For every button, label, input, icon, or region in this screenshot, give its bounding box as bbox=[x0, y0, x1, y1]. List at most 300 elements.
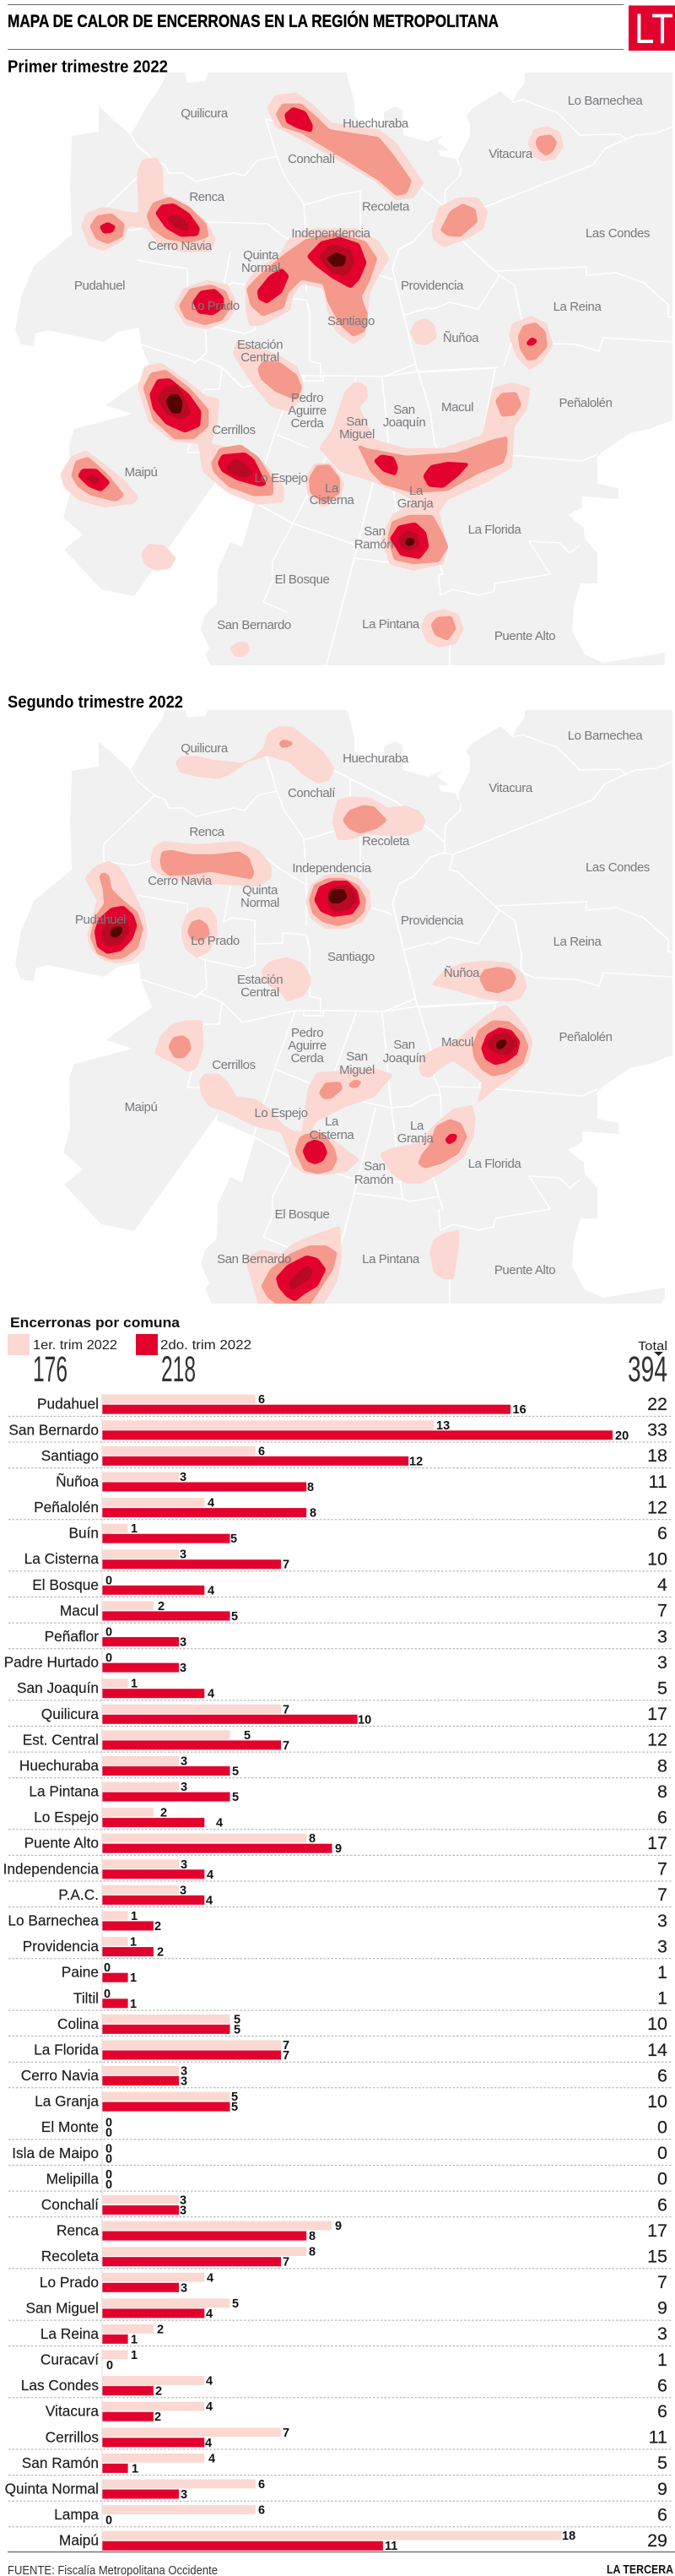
row: Cerro Navia: 6 bbox=[657, 2065, 667, 2085]
row: San Ramón: 5 bbox=[657, 2453, 667, 2473]
row: La Granja: 10 bbox=[647, 2091, 667, 2112]
legend: second quarter bbox=[136, 1334, 251, 1390]
row: El Monte: 0 bbox=[657, 2117, 667, 2137]
row: Peñaflor: 0 bbox=[105, 1626, 112, 1640]
row: Cerrillos: Cerrillos bbox=[46, 2428, 99, 2445]
row: Lampa: 0 bbox=[105, 2514, 112, 2528]
row: Las Condes: 4 bbox=[206, 2375, 213, 2389]
commune labels: second quarter: Pedro bbox=[291, 1026, 323, 1040]
commune labels: first quarter: Lo Barnechea bbox=[568, 94, 643, 108]
row: Cerro Navia bbox=[8, 2065, 672, 2089]
row: Maipú: 29 bbox=[647, 2530, 667, 2551]
row: Tiltil bbox=[8, 1988, 672, 2011]
row: El Bosque: 4 bbox=[208, 1584, 214, 1597]
row: Huechuraba: 5 bbox=[232, 1765, 239, 1778]
row: La Florida: 7 bbox=[283, 2049, 289, 2063]
commune labels: first quarter: Pudahuel bbox=[74, 279, 125, 293]
row: San Joaquín: 4 bbox=[208, 1688, 214, 1701]
row: San Joaquín bbox=[8, 1678, 672, 1701]
commune labels: second quarter: Vitacura bbox=[489, 781, 533, 795]
commune labels: first quarter: Recoleta bbox=[362, 199, 410, 214]
row: La Pintana: 5 bbox=[232, 1791, 239, 1804]
row: Lo Prado: 7 bbox=[657, 2272, 667, 2292]
row: Las Condes bbox=[8, 2375, 672, 2399]
commune labels: second quarter: Independencia bbox=[292, 861, 372, 876]
row: Huechuraba: 8 bbox=[657, 1755, 667, 1776]
commune labels: second quarter: Ñuñoa bbox=[444, 966, 480, 980]
commune labels: second quarter: Macul bbox=[441, 1035, 473, 1049]
legend: second quarter: 2do. trim 2022 bbox=[160, 1338, 251, 1353]
commune labels: second quarter: Joaquín bbox=[383, 1051, 425, 1066]
commune labels: first quarter: Quilicura bbox=[181, 106, 229, 121]
row: San Ramón bbox=[8, 2452, 672, 2476]
heat zones: first quarter bbox=[60, 93, 564, 657]
commune labels: second quarter: Cerro Navia bbox=[148, 874, 213, 888]
row: Cerro Navia: Cerro Navia bbox=[21, 2067, 99, 2084]
row: Vitacura bbox=[46, 2400, 667, 2424]
commune labels: second quarter: San bbox=[393, 1038, 415, 1052]
commune labels: first quarter: Vitacura bbox=[489, 147, 533, 161]
commune labels: first quarter: Lo Espejo bbox=[254, 471, 308, 485]
row: Recoleta bbox=[8, 2246, 672, 2270]
row: Cerrillos: 11 bbox=[649, 2427, 667, 2448]
row: Ñuñoa: 11 bbox=[649, 1472, 667, 1492]
row: Peñalolén: 4 bbox=[208, 1497, 214, 1510]
row: Providencia: 1 bbox=[130, 1936, 137, 1950]
row: San Ramón: San Ramón bbox=[22, 2454, 99, 2471]
row: La Reina: 2 bbox=[157, 2323, 164, 2336]
row: Conchalí: 3 bbox=[180, 2194, 186, 2207]
row: San Miguel bbox=[8, 2297, 672, 2321]
row: P.A.C.: 4 bbox=[206, 1894, 213, 1907]
row: Est. Central: 7 bbox=[283, 1739, 289, 1753]
row: Santiago: 18 bbox=[647, 1445, 667, 1466]
row: La Cisterna: 7 bbox=[283, 1559, 289, 1572]
row: San Bernardo: 20 bbox=[615, 1429, 629, 1443]
row: Tiltil: 1 bbox=[657, 1988, 667, 2009]
row: Curacaví: 0 bbox=[106, 2359, 113, 2373]
commune labels: second quarter bbox=[75, 729, 650, 1277]
row: Tiltil: 0 bbox=[104, 1988, 111, 2001]
row: Padre Hurtado: Padre Hurtado bbox=[4, 1654, 99, 1671]
commune labels: first quarter: La Pintana bbox=[362, 617, 420, 632]
bar chart: encerronas por comuna bbox=[3, 1393, 672, 2553]
row: Las Condes: 2 bbox=[155, 2385, 162, 2399]
commune labels: second quarter: Santiago bbox=[327, 950, 375, 964]
row: Huechuraba: Huechuraba bbox=[19, 1757, 99, 1774]
row: Recoleta: 7 bbox=[283, 2256, 289, 2270]
commune labels: second quarter: Cerda bbox=[291, 1051, 324, 1066]
row: Macul: Macul bbox=[60, 1602, 99, 1619]
row: Pudahuel: 16 bbox=[513, 1403, 526, 1417]
row: Cerrillos: 4 bbox=[205, 2437, 212, 2450]
row: Pudahuel: 22 bbox=[647, 1394, 667, 1414]
commune labels: first quarter: Central bbox=[240, 350, 279, 365]
row: Huechuraba bbox=[8, 1754, 672, 1778]
commune labels: first quarter: Normal bbox=[241, 261, 280, 275]
row: El Bosque: 4 bbox=[657, 1575, 667, 1595]
row: Lo Barnechea: 2 bbox=[154, 1920, 161, 1933]
row: San Bernardo: 13 bbox=[436, 1419, 450, 1433]
row: Quinta Normal: 6 bbox=[258, 2478, 265, 2492]
row: Maipú: 18 bbox=[562, 2530, 575, 2543]
row: Huechuraba: 3 bbox=[181, 1754, 187, 1768]
row: San Joaquín: San Joaquín bbox=[17, 1679, 99, 1696]
commune labels: first quarter: Conchalí bbox=[288, 152, 336, 166]
commune labels: second quarter: San bbox=[364, 1159, 386, 1174]
row: Paine bbox=[62, 1961, 667, 1985]
commune labels: first quarter: Estación bbox=[237, 338, 283, 352]
row: Las Condes: 6 bbox=[657, 2375, 667, 2395]
row: Paine: 0 bbox=[104, 1961, 111, 1975]
row: Ñuñoa bbox=[56, 1471, 667, 1494]
commune labels: second quarter: Conchalí bbox=[288, 786, 336, 800]
commune labels: second quarter: Huechuraba bbox=[343, 751, 409, 766]
row: Peñaflor: 3 bbox=[657, 1626, 667, 1646]
row: Lo Barnechea: 1 bbox=[131, 1910, 138, 1923]
row: Curacaví bbox=[40, 2349, 667, 2373]
row: Padre Hurtado: 0 bbox=[105, 1651, 112, 1665]
row: Recoleta: 8 bbox=[309, 2246, 316, 2259]
row: El Monte: 0 bbox=[105, 2117, 112, 2130]
row: Maipú: Maipú bbox=[59, 2532, 99, 2549]
row: La Reina: 1 bbox=[131, 2333, 138, 2346]
legend: second quarter: 218 bbox=[161, 1349, 196, 1390]
row: Puente Alto: 9 bbox=[335, 1842, 342, 1856]
row: Santiago: 6 bbox=[258, 1445, 265, 1458]
row: El Monte bbox=[8, 2117, 672, 2140]
row: Isla de Maipo: 0 bbox=[105, 2142, 112, 2156]
row: Puente Alto bbox=[8, 1832, 672, 1856]
row: Pudahuel bbox=[8, 1393, 672, 1417]
commune labels: first quarter: Providencia bbox=[401, 279, 464, 293]
row: Las Condes: Las Condes bbox=[21, 2377, 99, 2394]
row: Santiago: Santiago bbox=[41, 1447, 99, 1464]
row: Lo Espejo: 2 bbox=[160, 1807, 167, 1820]
row: La Reina bbox=[8, 2323, 672, 2346]
commune labels: first quarter: La bbox=[409, 484, 424, 498]
row: El Monte: El Monte bbox=[41, 2118, 99, 2135]
panel: first quarter heat map bbox=[15, 71, 672, 670]
row: Peñalolén: Peñalolén bbox=[34, 1499, 99, 1516]
row: Cerro Navia: 3 bbox=[181, 2065, 187, 2079]
commune labels: first quarter: Miguel bbox=[339, 427, 375, 442]
row: Conchalí bbox=[8, 2194, 672, 2217]
row: Santiago: 12 bbox=[409, 1455, 423, 1468]
row: Macul bbox=[8, 1600, 672, 1624]
row: Cerrillos: 7 bbox=[283, 2427, 289, 2440]
row: Quilicura bbox=[8, 1703, 672, 1727]
row: Lo Espejo: 4 bbox=[216, 1817, 223, 1830]
commune labels: second quarter: Miguel bbox=[339, 1063, 375, 1077]
row: Maipú: 11 bbox=[385, 2540, 397, 2553]
row: Ñuñoa: 3 bbox=[180, 1471, 186, 1484]
commune labels: second quarter: Estación bbox=[237, 973, 283, 987]
commune labels: second quarter: Lo Espejo bbox=[254, 1106, 308, 1120]
row: Quilicura: Quilicura bbox=[41, 1706, 99, 1722]
row: Conchalí: 6 bbox=[657, 2194, 667, 2215]
row: Paine: 1 bbox=[657, 1962, 667, 1982]
heading: first quarter map: Primer trimestre 2022 bbox=[8, 57, 168, 76]
commune labels: first quarter: Joaquín bbox=[383, 415, 425, 430]
row: Peñaflor: 3 bbox=[180, 1636, 186, 1650]
row: Lo Espejo: Lo Espejo bbox=[34, 1809, 99, 1825]
commune labels: second quarter: La Florida bbox=[468, 1157, 521, 1171]
row: Melipilla: 0 bbox=[105, 2168, 112, 2182]
row: Independencia bbox=[3, 1858, 672, 1882]
commune labels: second quarter: La bbox=[410, 1119, 424, 1133]
row: La Pintana: 3 bbox=[181, 1781, 187, 1794]
commune labels: second quarter: Lo Prado bbox=[191, 934, 240, 948]
legend: first quarter bbox=[8, 1334, 117, 1390]
row: La Florida: 14 bbox=[647, 2040, 667, 2060]
row: Est. Central: Est. Central bbox=[23, 1731, 99, 1748]
row: La Granja: La Granja bbox=[35, 2093, 99, 2110]
row: Independencia: 4 bbox=[207, 1868, 213, 1882]
row: Curacaví: Curacaví bbox=[40, 2351, 99, 2367]
commune labels: first quarter: Aguirre bbox=[288, 404, 327, 418]
row: La Cisterna: 3 bbox=[180, 1548, 186, 1562]
legend: total bbox=[628, 1339, 667, 1390]
row: La Pintana: 8 bbox=[657, 1782, 667, 1802]
row: La Pintana: La Pintana bbox=[29, 1783, 99, 1800]
row: Lo Barnechea bbox=[8, 1910, 667, 1933]
row: San Miguel: 9 bbox=[657, 2298, 667, 2318]
commune labels: first quarter: San bbox=[346, 415, 368, 429]
commune labels: first quarter: Lo Prado bbox=[191, 299, 240, 313]
row: P.A.C. bbox=[8, 1884, 672, 1907]
commune labels: second quarter: Ramón bbox=[354, 1173, 393, 1187]
row: Padre Hurtado bbox=[4, 1651, 667, 1675]
commune labels: first quarter bbox=[74, 94, 650, 643]
commune labels: second quarter: El Bosque bbox=[275, 1207, 329, 1222]
commune labels: first quarter: Cerro Navia bbox=[148, 239, 213, 253]
row: Lo Prado bbox=[40, 2271, 667, 2295]
row: La Cisterna: La Cisterna bbox=[24, 1550, 99, 1567]
row: Peñalolén: 8 bbox=[310, 1507, 316, 1521]
row: Providencia: 3 bbox=[657, 1936, 667, 1956]
commune labels: second quarter: Lo Barnechea bbox=[568, 729, 643, 743]
commune labels: second quarter: Renca bbox=[189, 825, 225, 839]
row: Quilicura: 17 bbox=[647, 1704, 667, 1724]
row: Renca bbox=[57, 2220, 667, 2243]
commune labels: second quarter: Normal bbox=[240, 896, 279, 910]
row: Isla de Maipo: 0 bbox=[657, 2143, 667, 2163]
commune labels: first quarter: Peñalolén bbox=[559, 396, 613, 410]
row: Isla de Maipo: 0 bbox=[105, 2152, 112, 2166]
commune labels: first quarter: Renca bbox=[189, 190, 225, 204]
commune labels: second quarter: Cerrillos bbox=[212, 1058, 256, 1072]
row: La Florida bbox=[8, 2039, 672, 2063]
row: Macul: 2 bbox=[158, 1600, 165, 1613]
row: Lo Espejo: 6 bbox=[657, 1807, 667, 1827]
row: Vitacura: 6 bbox=[657, 2401, 667, 2421]
row: Lampa bbox=[8, 2504, 672, 2528]
row: Est. Central bbox=[8, 1729, 672, 1753]
row: Macul: 7 bbox=[657, 1601, 667, 1621]
commune labels: second quarter: La Reina bbox=[554, 935, 602, 949]
row: Renca: Renca bbox=[57, 2222, 99, 2239]
commune labels: second quarter: Pudahuel bbox=[75, 913, 126, 927]
base map: communes bbox=[15, 71, 672, 670]
commune labels: first quarter: Ramón bbox=[354, 537, 393, 552]
commune labels: second quarter: La Pintana bbox=[362, 1252, 420, 1266]
row: La Reina: La Reina bbox=[40, 2325, 99, 2342]
row: Independencia: Independencia bbox=[3, 1860, 99, 1877]
row: Lo Barnechea: Lo Barnechea bbox=[8, 1912, 99, 1928]
row: Melipilla: 0 bbox=[657, 2169, 667, 2189]
legend: first quarter: 176 bbox=[33, 1349, 68, 1390]
commune labels: second quarter: Cisterna bbox=[310, 1128, 354, 1142]
row: Conchalí: 3 bbox=[180, 2204, 186, 2217]
row: Quinta Normal: 9 bbox=[657, 2479, 667, 2499]
row: Melipilla: 0 bbox=[105, 2178, 112, 2192]
row: Pudahuel: 6 bbox=[258, 1393, 265, 1407]
commune labels: first quarter: La bbox=[325, 481, 339, 496]
row: Curacaví: 1 bbox=[657, 2350, 667, 2370]
row: Isla de Maipo bbox=[8, 2142, 672, 2166]
commune labels: first quarter: Cerrillos bbox=[212, 423, 256, 437]
row: Puente Alto: 17 bbox=[647, 1833, 667, 1853]
row: Vitacura: 4 bbox=[206, 2400, 213, 2414]
row: Maipú bbox=[59, 2530, 667, 2553]
row: Independencia: 3 bbox=[181, 1858, 187, 1872]
commune labels: first quarter: Puente Alto bbox=[494, 629, 555, 643]
row: Melipilla bbox=[8, 2168, 672, 2192]
row: Colina: Colina bbox=[57, 2015, 99, 2032]
commune labels: second quarter: Recoleta bbox=[362, 834, 410, 849]
row: Curacaví: 1 bbox=[131, 2349, 138, 2362]
heading: second quarter map: Segundo trimestre 2022 bbox=[8, 693, 183, 712]
commune labels: first quarter: El Bosque bbox=[275, 572, 329, 587]
commune labels: first quarter: Granja bbox=[397, 496, 434, 511]
row: Peñaflor: Peñaflor bbox=[45, 1628, 99, 1645]
commune labels: first quarter: Las Condes bbox=[586, 226, 650, 241]
row: Santiago bbox=[8, 1445, 672, 1468]
row: Lampa: 6 bbox=[258, 2504, 265, 2518]
commune labels: first quarter: Pedro bbox=[291, 391, 323, 405]
row: Recoleta: Recoleta bbox=[41, 2248, 99, 2264]
commune labels: first quarter: Maipú bbox=[125, 465, 157, 480]
commune labels: first quarter: Santiago bbox=[327, 314, 375, 328]
row: La Reina: 3 bbox=[657, 2324, 667, 2344]
commune labels: first quarter: Huechuraba bbox=[343, 117, 409, 131]
row: San Miguel: San Miguel bbox=[26, 2299, 99, 2316]
row: Melipilla: Melipilla bbox=[46, 2170, 99, 2187]
row: Colina: 5 bbox=[234, 2023, 240, 2036]
commune labels: second quarter: Maipú bbox=[125, 1100, 157, 1114]
row: Lampa: 6 bbox=[657, 2504, 667, 2524]
commune labels: first quarter: Cerda bbox=[291, 416, 324, 431]
row: Cerrillos bbox=[8, 2427, 672, 2450]
row: San Ramón: 4 bbox=[208, 2452, 215, 2465]
row: Puente Alto: Puente Alto bbox=[24, 1835, 99, 1852]
row: Ñuñoa: 8 bbox=[307, 1481, 314, 1494]
commune labels: second quarter: La bbox=[325, 1114, 339, 1129]
row: Lo Prado: Lo Prado bbox=[40, 2274, 99, 2291]
row: Cerro Navia: 3 bbox=[181, 2075, 187, 2089]
row: Recoleta: 15 bbox=[647, 2246, 667, 2266]
row: Quinta Normal bbox=[5, 2478, 672, 2502]
row: La Granja: 5 bbox=[231, 2091, 238, 2104]
row: Lampa: Lampa bbox=[54, 2506, 99, 2523]
row: San Bernardo: 33 bbox=[647, 1420, 667, 1440]
row: Buín: 1 bbox=[131, 1522, 138, 1536]
legend: total: Total bbox=[638, 1339, 667, 1353]
commune labels: second quarter: Aguirre bbox=[288, 1039, 327, 1053]
row: Vitacura: 2 bbox=[154, 2411, 161, 2424]
commune labels: first quarter: Independencia bbox=[291, 226, 371, 241]
row: La Granja bbox=[35, 2091, 667, 2114]
row: San Joaquín: 1 bbox=[131, 1678, 138, 1691]
row: Tiltil: Tiltil bbox=[73, 1989, 99, 2006]
row: Renca: 8 bbox=[309, 2230, 316, 2243]
heat zones: second quarter bbox=[84, 726, 533, 1306]
row: Conchalí: Conchalí bbox=[41, 2196, 99, 2213]
row: Buín: Buín bbox=[68, 1525, 99, 1542]
row: Colina: 5 bbox=[234, 2013, 240, 2026]
panel: second quarter heat map bbox=[15, 706, 672, 1306]
commune labels: first quarter: San bbox=[364, 524, 386, 539]
commune labels: first quarter: Quinta bbox=[243, 248, 279, 263]
row: Padre Hurtado: 3 bbox=[657, 1652, 667, 1673]
commune labels: second quarter: Central bbox=[240, 985, 279, 1000]
row: Colina: 10 bbox=[647, 2014, 667, 2034]
row: Ñuñoa: Ñuñoa bbox=[56, 1472, 99, 1489]
row: Lo Barnechea: 3 bbox=[657, 1911, 667, 1931]
commune labels: first quarter: San bbox=[393, 403, 415, 417]
title: MAPA DE CALOR DE ENCERRONAS EN LA REGIÓN METROPOLITANA bbox=[8, 11, 499, 31]
row: San Ramón: 1 bbox=[132, 2462, 138, 2476]
row: Buín: 6 bbox=[657, 1523, 667, 1543]
row: San Joaquín: 5 bbox=[657, 1678, 667, 1698]
commune labels: second quarter: Puente Alto bbox=[494, 1263, 555, 1277]
row: Paine: Paine bbox=[62, 1964, 99, 1981]
commune labels: second quarter: Quilicura bbox=[181, 741, 229, 756]
header rules bbox=[8, 5, 624, 49]
row: Lo Prado: 3 bbox=[181, 2281, 187, 2295]
row: La Granja: 5 bbox=[231, 2101, 238, 2114]
commune labels: second quarter: Quinta bbox=[242, 883, 278, 898]
heading: bar chart: Encerronas por comuna bbox=[10, 1315, 181, 1331]
row: Independencia: 7 bbox=[657, 1859, 667, 1879]
row: La Cisterna: 10 bbox=[647, 1548, 667, 1569]
row: Pudahuel: Pudahuel bbox=[37, 1396, 99, 1413]
commune labels: second quarter: San bbox=[346, 1049, 368, 1064]
row: Providencia bbox=[8, 1936, 672, 1960]
row: Providencia: 2 bbox=[157, 1946, 164, 1960]
commune labels: second quarter: Peñalolén bbox=[559, 1030, 613, 1044]
row: Renca: 9 bbox=[335, 2220, 342, 2233]
row: El Monte: 0 bbox=[105, 2127, 112, 2140]
row: Lo Espejo bbox=[8, 1807, 672, 1830]
base map: communes bbox=[15, 706, 672, 1305]
row: Isla de Maipo: Isla de Maipo bbox=[12, 2145, 99, 2161]
row: P.A.C.: 7 bbox=[657, 1885, 667, 1905]
commune labels: second quarter: Granja bbox=[397, 1131, 434, 1146]
row: Providencia: Providencia bbox=[23, 1938, 99, 1955]
row: Renca: 17 bbox=[647, 2221, 667, 2241]
row: Buín bbox=[68, 1522, 667, 1546]
commune labels: second quarter: Providencia bbox=[401, 914, 464, 928]
row: La Cisterna bbox=[8, 1548, 672, 1572]
row: Macul: 5 bbox=[231, 1610, 238, 1624]
row: La Florida: La Florida bbox=[34, 2042, 99, 2058]
row: Quilicura: 7 bbox=[283, 1703, 289, 1716]
row: La Florida: 7 bbox=[283, 2039, 289, 2053]
row: Quinta Normal: 3 bbox=[181, 2488, 187, 2502]
row: Puente Alto: 8 bbox=[309, 1832, 316, 1846]
